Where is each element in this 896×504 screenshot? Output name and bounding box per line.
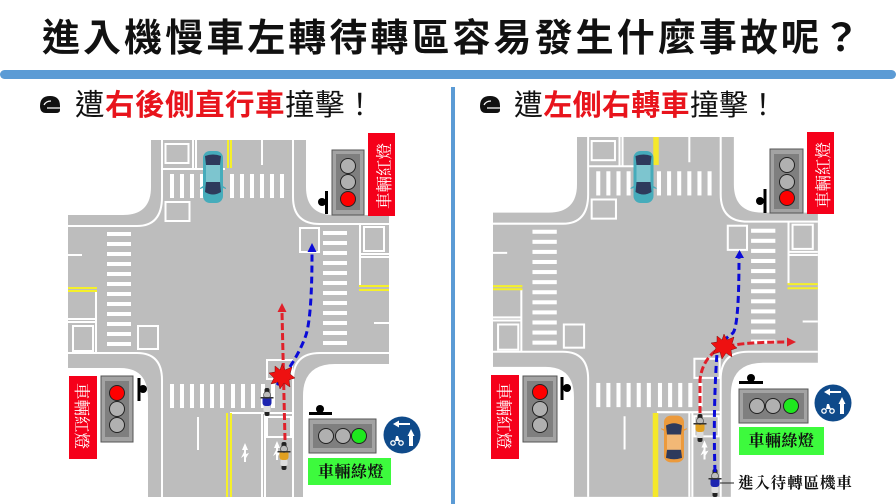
green light label: 車輛綠燈	[318, 462, 384, 481]
blue motorcycle	[708, 469, 722, 497]
traffic light green	[309, 405, 376, 453]
red light label bottom: 車輛紅燈	[494, 383, 513, 449]
panel: left scenario	[40, 89, 420, 498]
intersection road right	[492, 136, 819, 498]
red light label bottom: 車輛紅燈	[72, 383, 91, 449]
traffic light red top	[756, 149, 803, 213]
title: 進入機慢車左轉待轉區容易發生什麼事故呢？	[42, 18, 863, 60]
callout: motorcycle entering waiting zone: 進入待轉區機車	[738, 473, 853, 492]
red light label top: 車輛紅燈	[814, 142, 833, 208]
traffic light red bottom	[523, 376, 571, 442]
panel: right scenario	[480, 89, 853, 498]
green light label: 車輛綠燈	[748, 431, 815, 450]
arrow: blue straight path	[714, 250, 744, 472]
right heading	[480, 89, 778, 122]
blue header rule	[0, 70, 896, 79]
traffic light red top	[318, 150, 364, 215]
double yellow top	[227, 140, 231, 497]
yellow lines	[653, 137, 659, 497]
traffic light green	[739, 374, 808, 423]
right heading text: 遭左側右轉車撞擊！	[514, 89, 778, 122]
yellow motorcycle	[694, 414, 706, 442]
intersection road left	[67, 139, 390, 498]
arrow: red right turn path	[700, 338, 796, 413]
red light label bottom	[491, 375, 519, 459]
icon: two-stage turn sign	[814, 384, 852, 422]
orange car	[661, 416, 687, 462]
red light label top	[368, 133, 395, 216]
left heading text: 遭右後側直行車撞擊！	[75, 89, 375, 122]
yellow motorcycle	[278, 442, 290, 470]
green light label	[739, 427, 824, 455]
teal car	[630, 151, 656, 203]
green light label	[308, 458, 391, 485]
crash star	[711, 334, 737, 359]
arrow: red straight path	[278, 303, 286, 440]
teal car	[200, 151, 226, 203]
left heading	[40, 89, 375, 122]
icon: two-stage turn sign	[384, 416, 420, 454]
red light label top	[807, 132, 834, 214]
icon: helmet	[40, 96, 60, 113]
arrow: blue turning path	[277, 243, 316, 385]
red light label bottom	[69, 376, 97, 459]
traffic light red bottom	[101, 376, 147, 442]
blue motorcycle	[260, 388, 274, 416]
icon: helmet	[480, 96, 500, 113]
red light label top: 車輛紅燈	[375, 143, 394, 209]
crash star	[269, 364, 295, 389]
panel divider	[451, 87, 455, 504]
